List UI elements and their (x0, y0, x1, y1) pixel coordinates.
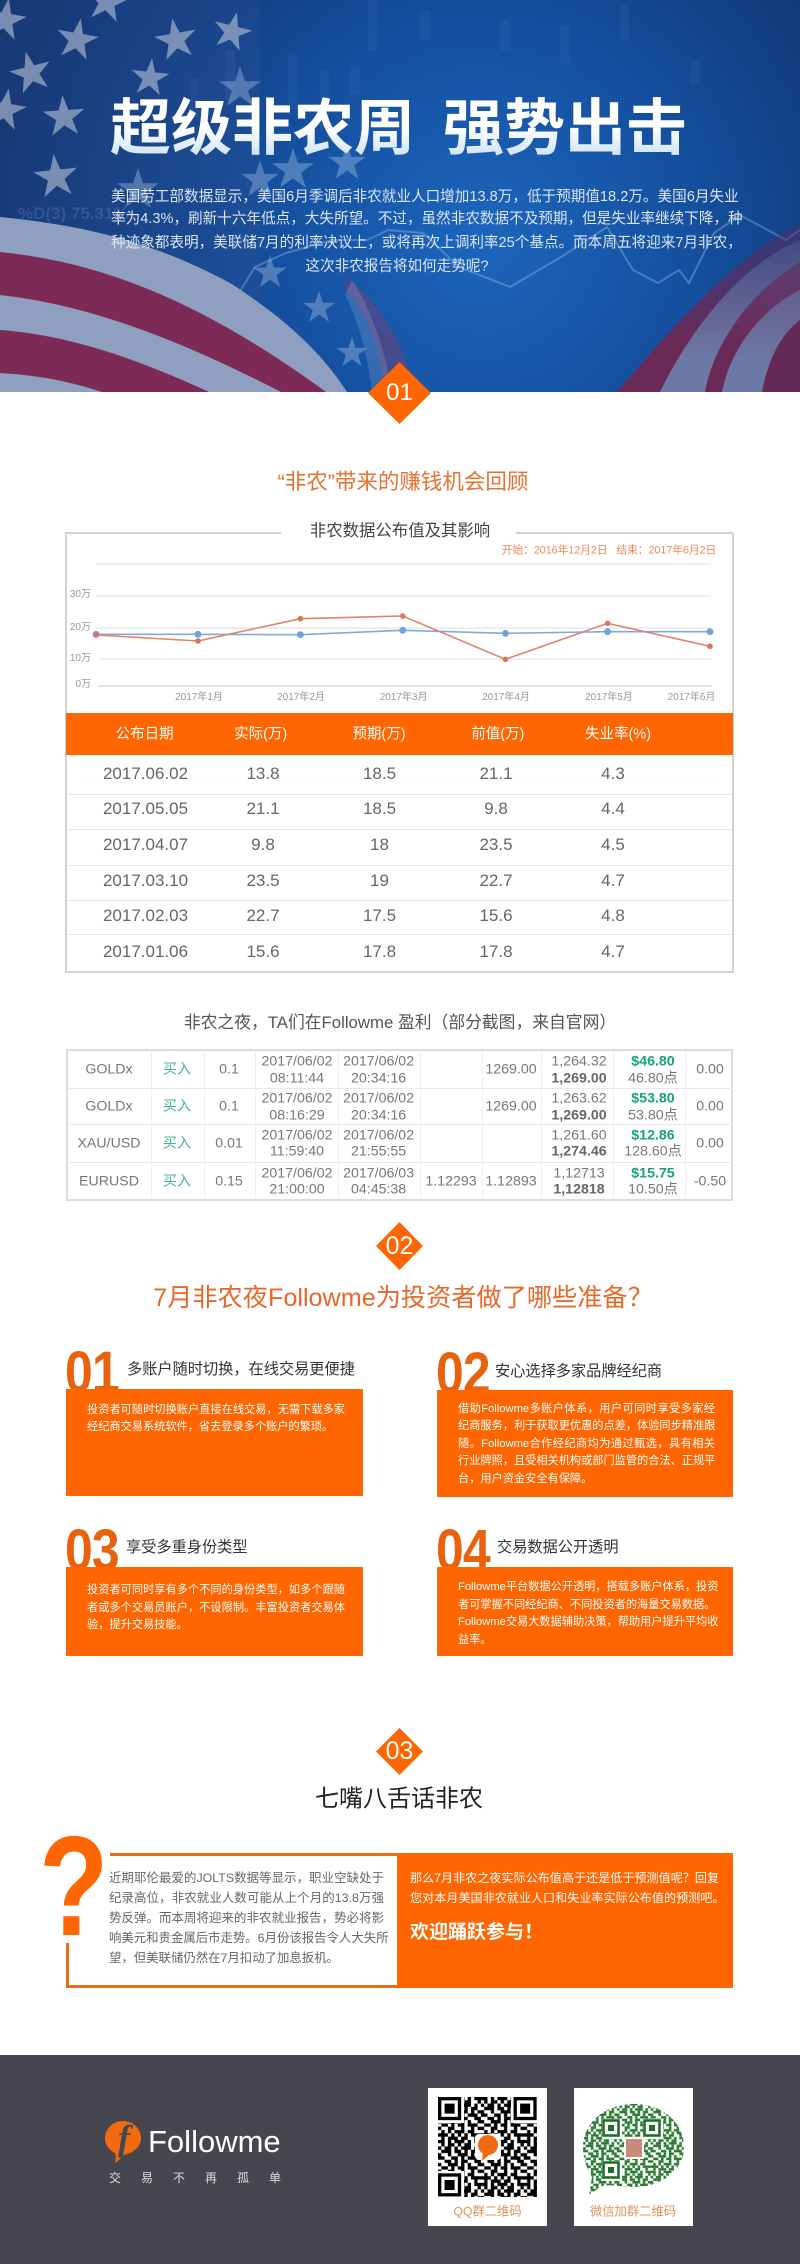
table rows: 4.7 (601, 942, 625, 961)
table rows: 2017.02.03 (103, 906, 188, 925)
trade rows: 2017/06/02 (261, 1165, 333, 1181)
trade rows: 2017/06/02 (261, 1127, 333, 1143)
trade rows: 买入 (163, 1062, 191, 1078)
section heading: review: “非农”带来的赚钱机会回顾 (278, 470, 528, 494)
series: forecast (blue) (93, 627, 713, 638)
trade rows: 1,263.62 (551, 1090, 607, 1106)
table rows: 9.8 (484, 799, 508, 818)
trade rows: 1.12293 (425, 1173, 477, 1189)
subheading: profit screenshots: 非农之夜，TA们在Followme 盈利（部分截图，来自官网） (184, 1013, 616, 1032)
trade rows: 10.50点 (628, 1182, 678, 1198)
call to action block: 欢迎踊跃参与！ (410, 1922, 543, 1943)
trade rows: 1,12713 (553, 1165, 605, 1181)
table rows: 15.6 (479, 906, 513, 925)
table rows: 2017.01.06 (103, 942, 188, 961)
main title: 强势出击 (443, 78, 687, 167)
trade rows: 0.00 (696, 1135, 724, 1151)
trade rows: $46.80 (631, 1053, 675, 1069)
trade rows: 20:34:16 (351, 1070, 406, 1086)
call to action block (397, 1853, 733, 1988)
trade rows: 1,264.32 (551, 1053, 607, 1069)
table rows: 2017.04.07 (103, 835, 188, 854)
feature heading: 交易数据公开透明 (497, 1539, 618, 1556)
number 01: 01 (65, 1340, 119, 1405)
right flag stripes (617, 223, 800, 392)
QR code (438, 2097, 537, 2197)
discussion text: 近期耶伦最爱的JOLTS数据等显示，职业空缺处于 (109, 1871, 384, 1885)
x axis labels: 2017年1月 (175, 690, 223, 703)
section badge 03: 03 (386, 1737, 413, 1765)
x axis labels: 2017年2月 (277, 690, 325, 703)
box bottom border (66, 1985, 397, 1988)
question mark icon: ? (39, 1807, 108, 1966)
trade rows: 0.00 (696, 1099, 724, 1115)
chart date range: 开始：2016年12月2日 结束：2017年6月2日 (502, 545, 716, 557)
feature body: 纪商服务，利于获取更优惠的点差，体验同步精准跟 (458, 1420, 715, 1432)
trade rows: 0.15 (215, 1173, 243, 1189)
trade rows: 1269.00 (485, 1062, 537, 1078)
table header (66, 713, 733, 755)
feature body (66, 1389, 363, 1496)
feature body: 验，提升交易技能。 (87, 1619, 188, 1631)
table rows: 23.5 (246, 871, 280, 890)
trade rows: 11:59:40 (270, 1144, 324, 1160)
trade rows: 46.80点 (628, 1070, 678, 1086)
hero intro text: 美国劳工部数据显示，美国6月季调后非农就业人口增加13.8万，低于预期值18.2万。美国6月失业 (111, 189, 739, 205)
trade rows: 2017/06/02 (343, 1053, 414, 1069)
QR code (583, 2104, 684, 2194)
feature body: Followme平台数据公开透明，搭载多账户体系，投资 (458, 1581, 718, 1593)
trade rows: 1.12893 (485, 1173, 537, 1189)
trade rows: 128.60点 (624, 1144, 682, 1160)
trade rows: 买入 (163, 1173, 191, 1189)
hero banner: %D(3) 75.31% (18, 204, 129, 223)
table rows: 21.1 (246, 799, 280, 818)
hero banner (0, 0, 800, 392)
table header: 失业率(%) (585, 726, 651, 742)
table rows: 2017.03.10 (103, 871, 188, 890)
table rows: 2017.06.02 (103, 764, 188, 783)
discussion text: 纪录高位，非农就业人数可能从上个月的13.8万强 (109, 1891, 384, 1905)
table rows: 19 (370, 871, 389, 890)
trade rows: GOLDx (85, 1062, 133, 1078)
panel: discussion box (39, 1807, 733, 1988)
trade rows: XAU/USD (77, 1135, 141, 1151)
discussion text: 响美元和贵金属后市走势。6月份该报告令人大失所 (109, 1931, 388, 1945)
logo (105, 2120, 301, 2185)
main title (110, 78, 687, 167)
logo icon (105, 2120, 141, 2163)
panel: feature 04 (436, 1518, 733, 1656)
trade rows: 2017/06/02 (261, 1090, 333, 1106)
feature heading: 多账户随时切换，在线交易更便捷 (127, 1361, 355, 1378)
number 03: 03 (65, 1518, 119, 1583)
trade rows: 0.1 (219, 1062, 239, 1078)
middle faint stripes (345, 275, 415, 392)
main title: 超级非农周 (110, 78, 415, 167)
hero intro text: 种迹象都表明，美联储7月的利率决议上，或将再次上调利率25个基点。而本周五将迎来7月非农， (111, 235, 742, 251)
trade rows: 20:34:16 (351, 1107, 406, 1123)
y axis labels: 10万 (70, 653, 91, 664)
chart title: 非农数据公布值及其影响 (310, 522, 490, 540)
panel: feature 02 (436, 1341, 733, 1497)
x axis labels: 2017年5月 (585, 690, 633, 703)
section badge 02 (376, 1222, 423, 1270)
section badge 01 (368, 362, 431, 424)
feature body (437, 1390, 733, 1497)
section badge 03 (376, 1728, 423, 1775)
trade rows: 买入 (163, 1099, 191, 1115)
table rows: 4.7 (601, 871, 625, 890)
feature body: 投资者可同时享有多个不同的身份类型，如多个跟随 (87, 1584, 345, 1596)
feature body (66, 1567, 363, 1656)
footer (0, 2055, 800, 2264)
box top border (110, 1853, 397, 1856)
x axis labels: 2017年4月 (482, 690, 530, 703)
left flag stripes (0, 217, 347, 392)
feature body: 益率。 (458, 1634, 492, 1646)
call to action block: 您对本月美国非农就业人口和失业率实际公布值的预测吧。 (410, 1891, 724, 1905)
tagline: 交易不再孤单 (109, 2171, 301, 2185)
table header: 实际(万) (234, 726, 287, 742)
table rows: 13.8 (246, 764, 280, 783)
feature body: 投资者可随时切换账户直接在线交易，无需下载多家 (87, 1404, 345, 1416)
discussion text: 势反弹。而本周将迎来的非农就业报告，势必将影 (109, 1911, 384, 1925)
table rows: 23.5 (479, 835, 513, 854)
QR label: QQ群二维码 (453, 2205, 522, 2219)
feature body: 行业牌照，且受相关机构或部门监管的合法、正规平 (458, 1455, 715, 1467)
trade rows: 2017/06/03 (343, 1165, 414, 1181)
table rows: 2017.05.05 (103, 799, 188, 818)
stars (0, 0, 256, 198)
trade rows: $15.75 (631, 1165, 675, 1181)
trade rows: 2017/06/02 (343, 1127, 414, 1143)
trade rows: 0.1 (219, 1099, 239, 1115)
panel: feature 03 (65, 1518, 363, 1656)
trade rows: 买入 (163, 1135, 191, 1151)
y axis labels: 30万 (70, 589, 91, 600)
chart frame top line right (516, 532, 733, 534)
trade records table (66, 1049, 733, 1201)
panel: feature 01 (65, 1340, 363, 1496)
feature body (437, 1567, 733, 1656)
feature body: 台，用户资金安全有保障。 (458, 1473, 592, 1485)
panel: chart and data table frame (65, 533, 734, 973)
trade rows: 2017/06/02 (343, 1090, 414, 1106)
feature body: 者可掌握不同经纪商、不同投资者的海量交易数据。 (458, 1599, 715, 1611)
call to action block: 那么7月非农之夜实际公布值高于还是低于预测值呢？回复 (410, 1871, 719, 1885)
trade rows: $12.86 (631, 1127, 675, 1143)
hero intro text: 率为4.3%，刷新十六年低点，大失所望。不过，虽然非农数据不及预期，但是失业率继续下降，种 (111, 211, 743, 227)
trade rows: 1,12818 (553, 1182, 605, 1198)
trade rows: 53.80点 (628, 1107, 678, 1123)
trade rows: 21:00:00 (269, 1182, 325, 1198)
hero intro text: 这次非农报告将如何走势呢? (305, 258, 489, 274)
table rows: 17.8 (363, 942, 396, 961)
data table (66, 713, 733, 961)
table rows (67, 764, 732, 961)
trade rows: 1,269.00 (551, 1107, 607, 1123)
trade rows: 1269.00 (485, 1099, 537, 1115)
table rows: 4.8 (601, 906, 625, 925)
feature body: Followme交易大数据辅助决策，帮助用户提升平均收 (458, 1616, 718, 1628)
table rows: 22.7 (246, 906, 280, 925)
table rows: 4.3 (601, 764, 625, 783)
section badge 02: 02 (386, 1232, 413, 1260)
section heading: preparation: 7月非农夜Followme为投资者做了哪些准备？ (153, 1284, 653, 1312)
section heading: discussion: 七嘴八舌话非农 (315, 1786, 483, 1813)
feature heading: 安心选择多家品牌经纪商 (495, 1363, 662, 1380)
table rows: 9.8 (251, 835, 275, 854)
y axis labels: 20万 (70, 622, 91, 633)
feature body: 者或多个交易员账户，不设限制。丰富投资者交易体 (87, 1602, 345, 1614)
QR card: QQ group (428, 2088, 547, 2226)
wordmark: Followme (148, 2124, 281, 2159)
x axis labels: 2017年6月 (668, 690, 715, 703)
trade rows: 04:45:38 (351, 1182, 406, 1198)
trade rows (77, 1053, 726, 1198)
table rows: 18.5 (363, 799, 396, 818)
trade rows: 08:16:29 (269, 1107, 325, 1123)
trade rows: 21:55:55 (351, 1144, 406, 1160)
table rows: 17.5 (363, 906, 396, 925)
trade rows: $53.80 (631, 1090, 675, 1106)
y axis labels (70, 589, 91, 690)
feature body: 经纪商交易系统软件，省去登录多个账户的繁琐。 (87, 1421, 333, 1433)
discussion text (109, 1871, 388, 1965)
feature body: 借助Followme多账户体系，用户可同时享受多家经 (458, 1403, 715, 1415)
box left border (66, 1943, 69, 1988)
number 02: 02 (436, 1341, 490, 1406)
table rows: 4.5 (601, 835, 625, 854)
trade rows: 1,269.00 (551, 1070, 607, 1086)
QR card: WeChat group (574, 2088, 692, 2226)
trade rows: 0.00 (696, 1062, 724, 1078)
x axis labels: 2017年3月 (380, 690, 428, 703)
faint line chart (224, 215, 800, 317)
trade rows: 1,261.60 (551, 1127, 607, 1143)
trade rows: 2017/06/02 (261, 1053, 333, 1069)
trade rows: EURUSD (79, 1173, 139, 1189)
number 04: 04 (436, 1518, 490, 1583)
table header: 预期(万) (352, 726, 406, 742)
discussion text: 望，但美联储仍然在7月扣动了加息扳机。 (109, 1951, 339, 1965)
table rows: 4.4 (601, 799, 625, 818)
table header: 公布日期 (116, 726, 174, 742)
line chart (70, 563, 715, 703)
y axis labels: 0万 (75, 679, 91, 690)
trade rows: 0.01 (215, 1135, 243, 1151)
series: actual (red) (93, 613, 713, 662)
trade rows: 1,274.46 (551, 1144, 607, 1160)
table header: 前值(万) (471, 726, 524, 742)
hero intro text (111, 188, 743, 274)
feature body: 随。Followme合作经纪商均为通过甄选，具有相关 (458, 1438, 715, 1450)
section badge 01: 01 (386, 379, 413, 406)
trade rows: 08:11:44 (270, 1070, 324, 1086)
trade rows: GOLDx (85, 1099, 133, 1115)
chart frame top line left (65, 532, 281, 534)
table rows: 15.6 (246, 942, 280, 961)
x axis labels (175, 690, 715, 703)
table rows: 18.5 (363, 764, 396, 783)
table rows: 18 (370, 835, 389, 854)
table rows: 22.7 (479, 871, 513, 890)
table rows: 21.1 (479, 764, 513, 783)
feature heading: 享受多重身份类型 (126, 1539, 248, 1556)
trade rows: -0.50 (694, 1173, 726, 1189)
table rows: 17.8 (479, 942, 513, 961)
QR label: 微信加群二维码 (590, 2205, 676, 2219)
